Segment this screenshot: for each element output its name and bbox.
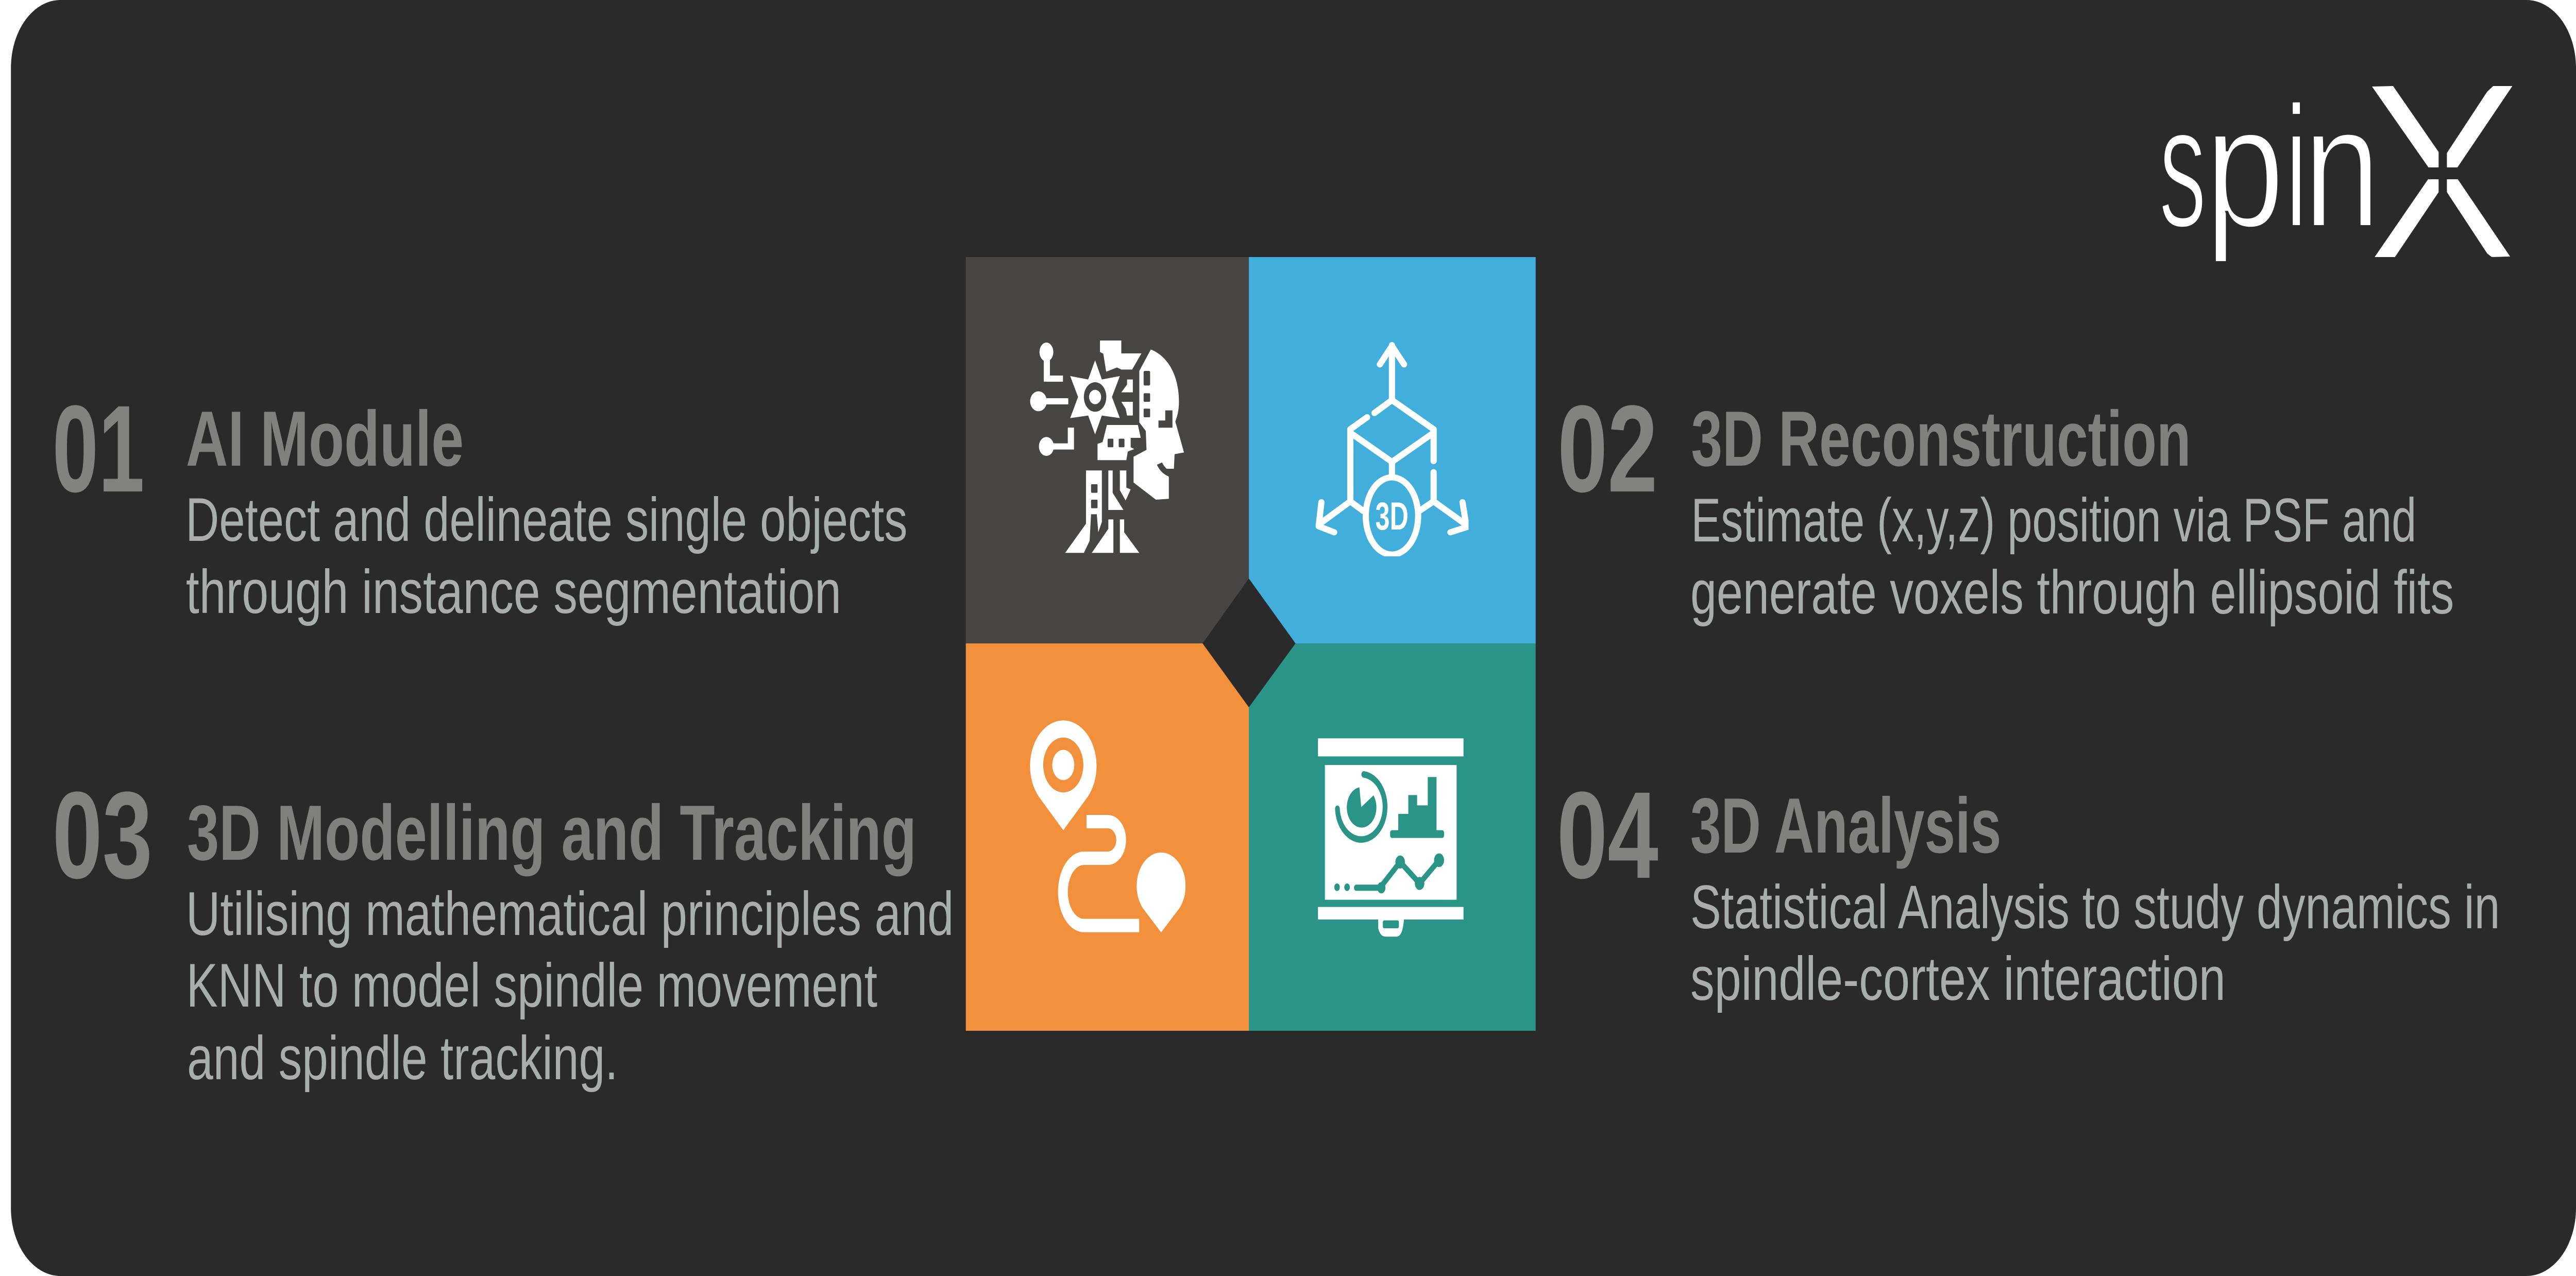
quadrant tile: route — [966, 643, 1249, 1031]
heading: 3D Analysis: 3D Analysis — [1690, 782, 2001, 870]
body text: 3D Reconstruction: Estimate (x,y,z) position via PSF and — [1691, 486, 2416, 555]
body text: 3D Analysis: spindle-cortex interaction — [1690, 945, 2226, 1013]
icon: presentation screen with charts — [1318, 738, 1464, 937]
number 04: 04 — [1557, 766, 1658, 904]
step 01: AI Module — [53, 380, 907, 626]
icon: 3D cube with axes — [1319, 345, 1467, 555]
body text: 3D Analysis: Statistical Analysis to study dynamics in — [1690, 873, 2500, 942]
icon: AI head with gear — [1030, 341, 1184, 553]
heading: AI Module: AI Module — [186, 396, 464, 483]
logo: spinX: s — [2159, 70, 2207, 264]
body text: 3D Modelling and Tracking: and spindle tracking. — [187, 1024, 618, 1093]
quadrant tile: analysis — [1249, 643, 1536, 1031]
number 03: 03 — [53, 766, 152, 904]
body text: AI Module: Detect and delineate single objects — [185, 486, 907, 554]
quadrant tile: AI — [966, 257, 1249, 643]
logo: spinX: p — [2205, 70, 2285, 265]
body text: 3D Reconstruction — [1690, 486, 2454, 627]
number 01: 01 — [53, 380, 145, 518]
centre diamond — [1202, 579, 1296, 707]
heading: 3D Reconstruction: 3D Reconstruction — [1691, 396, 2191, 483]
body text: 3D Modelling and Tracking — [186, 880, 954, 1093]
number 02: 02 — [1557, 380, 1657, 518]
logo: spinX — [2159, 70, 2513, 265]
body text: 3D Modelling and Tracking: Utilising mathematical principles and — [186, 880, 954, 948]
quadrant tile: 3D — [1249, 257, 1536, 643]
body text: 3D Analysis — [1690, 873, 2500, 1013]
heading: 3D Modelling and Tracking: 3D Modelling and Tracking — [187, 790, 917, 877]
body text: 3D Reconstruction: generate voxels through ellipsoid fits — [1690, 558, 2454, 627]
step 03: 3D Modelling and Tracking — [53, 766, 954, 1093]
step 02: 3D Reconstruction — [1557, 380, 2454, 627]
body text: AI Module: through instance segmentation — [186, 558, 841, 626]
body text: AI Module — [185, 486, 907, 626]
logo: spinX: i — [2285, 70, 2308, 264]
body text: 3D Modelling and Tracking: KNN to model spindle movement — [187, 951, 877, 1020]
step 04: 3D Analysis — [1557, 766, 2500, 1013]
icon: 3D cube with axes: 3D — [1375, 495, 1409, 538]
icon: route between two pins — [1030, 721, 1185, 932]
logo: spinX: n — [2303, 70, 2381, 264]
